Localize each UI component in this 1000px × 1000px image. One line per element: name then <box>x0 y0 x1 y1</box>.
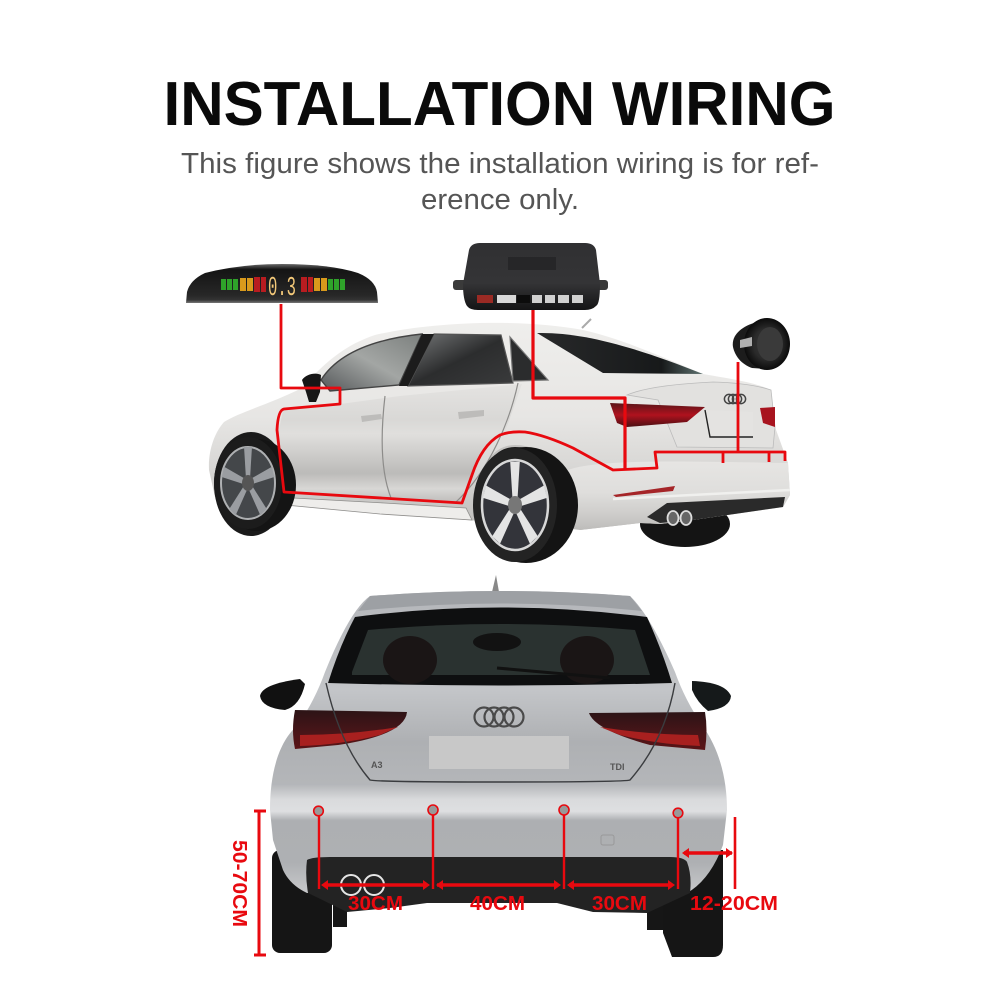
vertical height bar <box>254 811 266 955</box>
rings logo <box>474 708 524 726</box>
front wheel arch <box>214 432 288 536</box>
interior glimpse <box>352 624 650 675</box>
sensor marker circles <box>314 805 683 818</box>
exhaust tips <box>668 511 692 525</box>
rear wheel arch <box>476 446 570 530</box>
rear door window <box>408 334 513 386</box>
sensor drop lines <box>319 815 678 889</box>
measurement labels <box>228 840 778 927</box>
rear view car <box>260 575 731 957</box>
door pillar <box>399 334 434 386</box>
car body side <box>209 323 790 530</box>
subtitle text: erence only. <box>421 184 579 216</box>
rear tyres <box>272 850 332 953</box>
tail light streak left <box>300 727 398 746</box>
door panels <box>277 384 522 503</box>
tail light left <box>610 403 705 427</box>
rear reflector <box>613 486 675 497</box>
side mirror <box>302 374 321 402</box>
side view car with wiring <box>209 319 790 563</box>
connector ports <box>477 295 583 303</box>
roof highlight <box>358 591 642 611</box>
model badges <box>371 760 624 772</box>
license plate <box>705 410 753 437</box>
antenna <box>492 575 499 592</box>
sensor positions and measurements <box>254 805 735 955</box>
wire: display to sensors <box>277 304 785 503</box>
lower sill <box>275 497 472 520</box>
wire: control box <box>533 310 625 470</box>
LED bars left <box>221 277 266 292</box>
measurement labels: 30CM <box>348 893 403 915</box>
measurement labels: 40CM <box>470 893 525 915</box>
antenna <box>582 319 591 328</box>
wire: rear sensor feed <box>723 362 769 463</box>
title: INSTALLATION WIRING <box>164 70 836 139</box>
subtitle text <box>181 148 819 216</box>
measurement labels: 12-20CM <box>690 893 778 915</box>
rear car body <box>270 591 727 893</box>
door handles <box>361 414 382 422</box>
parking display unit <box>186 264 378 304</box>
model badges: A3 <box>371 760 383 770</box>
tail light right <box>589 712 706 750</box>
model badges: TDI <box>610 762 624 772</box>
ultrasonic sensor <box>733 318 790 370</box>
rings logo <box>724 394 746 404</box>
left mirror <box>260 679 305 710</box>
measurement labels: 30CM <box>592 893 647 915</box>
rear window <box>537 333 703 374</box>
rear wheel <box>473 447 578 563</box>
right mirror <box>692 681 731 711</box>
digital readout: 0.3 <box>268 274 296 304</box>
far rear wheel <box>640 501 730 547</box>
front side window <box>321 334 422 391</box>
license plate <box>429 736 569 769</box>
headrests <box>383 636 437 684</box>
trunk lid and spoiler <box>627 382 775 448</box>
trunk outline <box>326 683 675 782</box>
horizontal arrows <box>324 853 732 885</box>
control box <box>453 243 608 310</box>
arrow heads <box>321 848 733 890</box>
12-20cm vertical bar <box>734 817 736 889</box>
tail light right <box>760 407 775 427</box>
inner mirror <box>473 633 521 651</box>
chrome strip <box>613 490 790 499</box>
fuel flap <box>601 835 614 845</box>
lower diffuser <box>306 857 691 913</box>
measurement labels: 50-70CM <box>228 840 250 927</box>
tail light left <box>293 710 407 749</box>
rear bumper <box>568 462 790 530</box>
tail light streak right <box>600 727 700 746</box>
lower diffuser <box>647 497 785 523</box>
wiper <box>497 668 610 678</box>
rear window <box>328 608 672 686</box>
LED bars right <box>301 277 345 292</box>
front wheel <box>214 437 296 531</box>
door shut lines <box>382 383 518 502</box>
red wiring harness <box>277 304 785 503</box>
subtitle text: This figure shows the installation wiring is for ref- <box>181 148 819 180</box>
exhaust tips <box>341 875 384 895</box>
quarter window <box>510 337 548 381</box>
mud flaps <box>333 895 663 930</box>
